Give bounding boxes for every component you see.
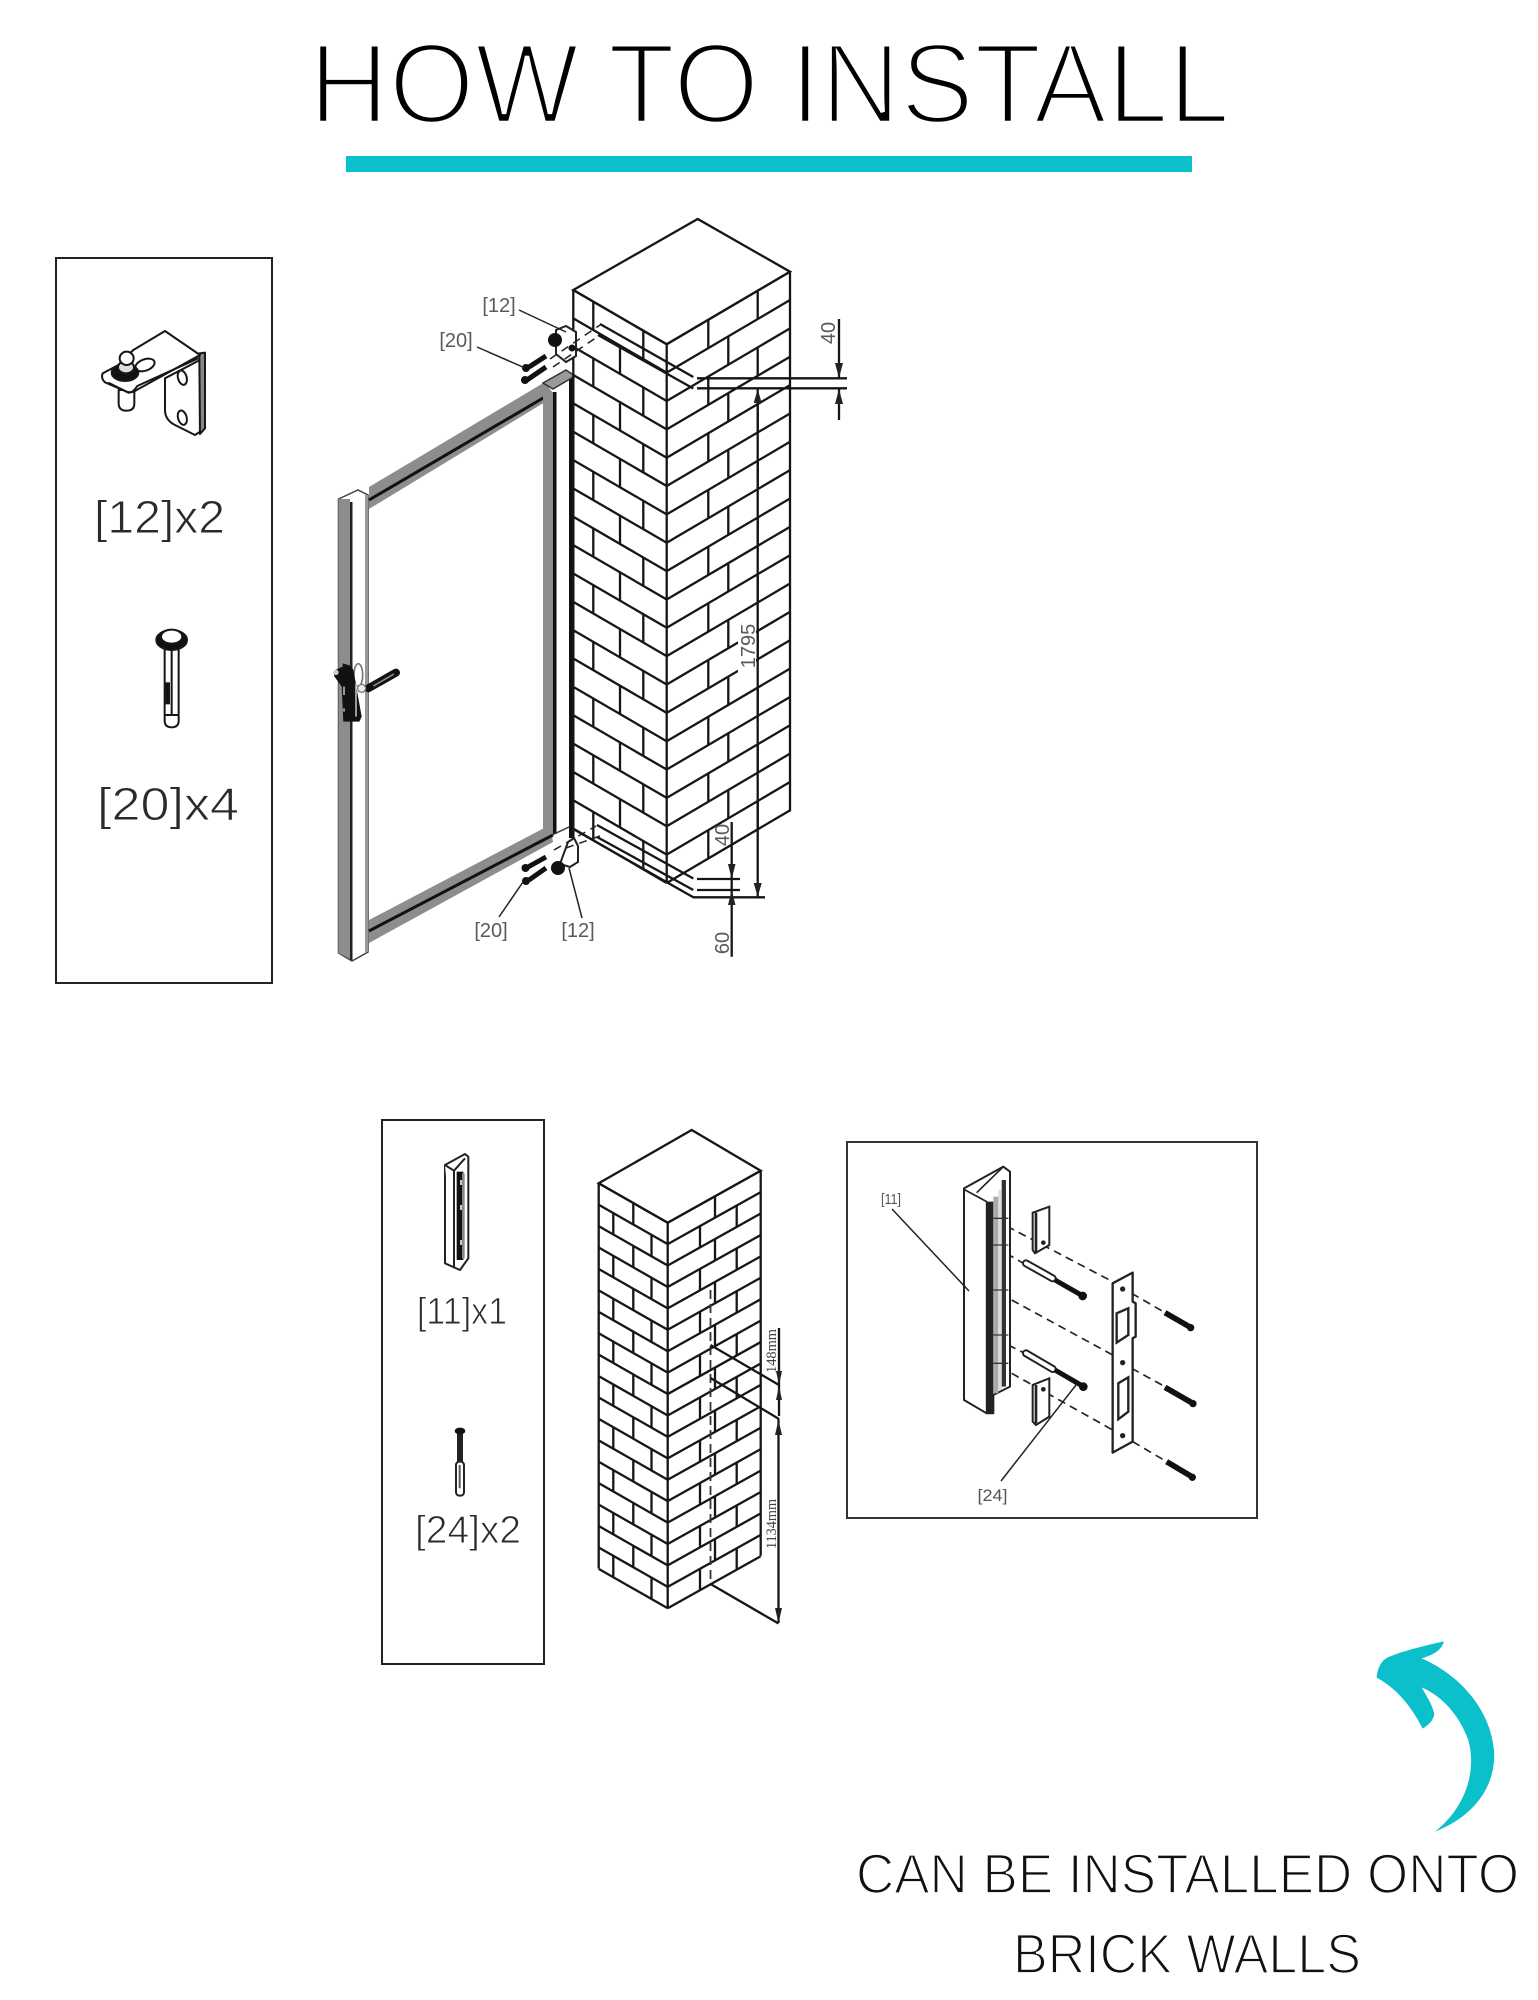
1795 dimension: [693, 389, 765, 897]
callout: part 11: [881, 1191, 969, 1291]
diagram: door frame: [333, 370, 575, 961]
callout: part 12 bottom: [561, 868, 595, 942]
1134mm dimension: [710, 1419, 782, 1624]
bottom 40 and 60 dimensions: [712, 822, 736, 957]
door lock and lever handle: [333, 663, 396, 722]
top hinge bracket and screws: [521, 325, 600, 384]
icon: part 24 screw and plug: [455, 1428, 465, 1496]
drilling centre line: [710, 1290, 712, 1584]
bottom fixing guide lines: [575, 825, 740, 897]
door left stile: [338, 490, 368, 961]
brick courses: [599, 1183, 668, 1608]
caption: [856, 1842, 1519, 1985]
callout: part 20 bottom: [20]: [474, 920, 508, 942]
1134mm dimension: 1134mm: [764, 1499, 780, 1549]
callout: part 20 top: [20]: [439, 330, 473, 352]
bottom hinge bracket and screws: [522, 826, 600, 885]
panel: striker parts: [382, 1120, 544, 1664]
upper plug and screw: [1026, 1263, 1087, 1300]
label: part 11 quantity: [11]x1: [417, 1291, 507, 1333]
diagram: brick pillar with door fixings: [439, 219, 847, 957]
callout: part 11: [11]: [881, 1191, 901, 1208]
lower plug and screw: [1026, 1353, 1088, 1391]
callout: part 12 top: [482, 295, 566, 332]
callout: part 12 top: [12]: [482, 295, 516, 317]
1795 dimension: 1795: [738, 624, 760, 668]
brick courses: [573, 290, 667, 883]
top 40 dimension: [818, 319, 843, 420]
brick joints: [613, 1196, 737, 1599]
fixing screws: [1165, 1313, 1197, 1481]
panel: hinge parts: [56, 258, 272, 983]
panel: striker exploded view: [847, 1142, 1257, 1518]
icon: part 11 channel: [445, 1154, 468, 1270]
caption: BRICK WALLS: [1013, 1922, 1361, 1985]
callout: part 24: [24]: [978, 1486, 1008, 1505]
diagram: second brick pillar: [599, 1130, 782, 1624]
callout: part 24: [978, 1385, 1076, 1505]
door right stile: [543, 392, 555, 834]
icon: anchor bolt: [156, 630, 187, 727]
icon: hinge bracket: [102, 331, 205, 435]
exploded assembly drawing: [964, 1167, 1197, 1481]
callout: part 12 bottom: [12]: [561, 920, 595, 942]
brick joints: [593, 291, 758, 869]
channel profile: [964, 1167, 1010, 1413]
bottom 40 and 60 dimensions: 40: [712, 824, 734, 846]
label: part 20 quantity: [20]x4: [97, 778, 239, 830]
bottom 40 and 60 dimensions: 60: [712, 932, 734, 954]
148mm dimension: 148mm: [764, 1329, 780, 1373]
door top corner cap: [543, 370, 575, 389]
dashed assembly lines: [995, 1220, 1167, 1462]
148mm dimension: [710, 1328, 782, 1419]
upper small plate: [1033, 1207, 1049, 1253]
door top rail: [369, 382, 555, 509]
callout: part 20 bottom: [474, 882, 523, 942]
top 40 dimension: 40: [818, 322, 840, 344]
callout: part 20 top: [439, 330, 525, 368]
door bottom rail: [369, 825, 553, 943]
pillar top and edges: [599, 1130, 761, 1608]
label: part 12 quantity: [12]x2: [94, 491, 225, 543]
lower small plate: [1033, 1378, 1049, 1425]
title: HOW TO INSTALL: [309, 21, 1230, 148]
pillar top and edges: [573, 219, 790, 883]
top fixing guide lines: [598, 324, 847, 388]
arrow pointing to brick diagrams: [1377, 1641, 1494, 1832]
strike plate: [1113, 1273, 1136, 1453]
caption: CAN BE INSTALLED ONTO: [856, 1842, 1519, 1905]
title underline: [346, 156, 1192, 172]
label: part 24 quantity: [24]x2: [415, 1509, 521, 1552]
